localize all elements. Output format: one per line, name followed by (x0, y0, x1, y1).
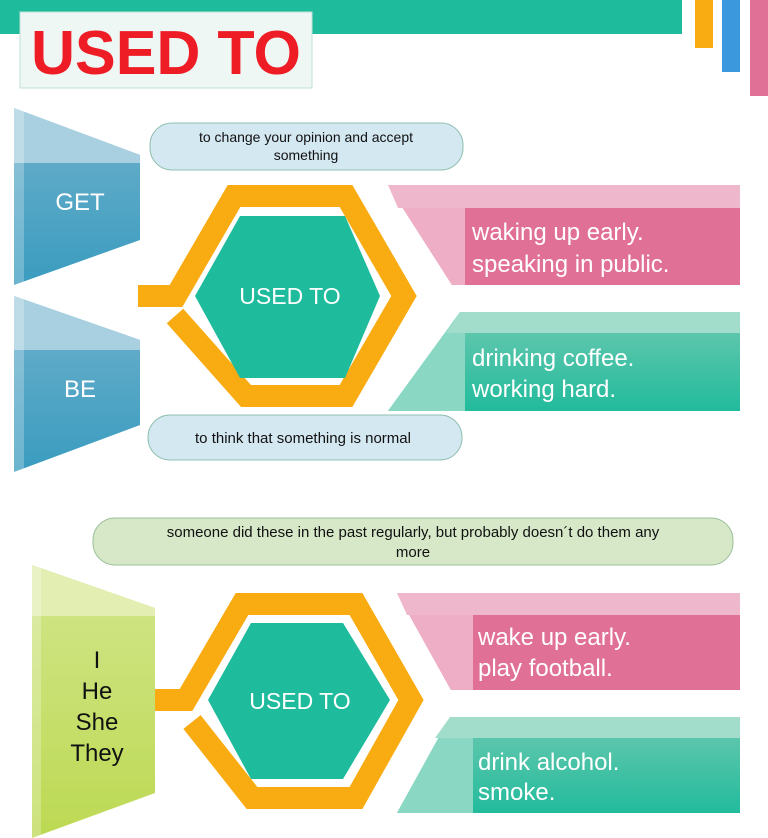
header bar (0, 0, 682, 34)
hexagon: used to (bottom) (155, 604, 411, 798)
panel: pink getting used to (388, 185, 740, 285)
shape: subjects (32, 565, 155, 838)
callout: be definition: to think that something is normal (195, 430, 411, 447)
hexagon: used to (top) (138, 196, 404, 396)
panel: teal be used to (388, 312, 740, 411)
callout: past habit definition: someone did these in the past regularly, but probably doesn´t do them any (167, 524, 660, 541)
panel: pink getting used to: speaking in public. (472, 251, 669, 278)
callout: past habit definition (93, 518, 733, 565)
callout: get definition (150, 123, 463, 170)
shape: subjects: I (94, 647, 100, 674)
panel: pink past habits: play football. (478, 655, 613, 682)
panel: pink past habits (397, 593, 740, 690)
hexagon: used to (top): USED TO (239, 283, 341, 309)
shape: GET: GET (55, 189, 105, 216)
panel: teal past habits: drink alcohol. (478, 749, 619, 776)
hexagon: used to (bottom): USED TO (249, 688, 351, 714)
panel: teal past habits: smoke. (478, 779, 555, 806)
decorative bars top right (695, 0, 768, 96)
callout: get definition: something (274, 147, 338, 163)
panel: pink past habits: wake up early. (477, 624, 631, 651)
shape: GET (14, 108, 140, 285)
panel: teal be used to: drinking coffee. (472, 345, 634, 372)
shape: BE: BE (64, 376, 96, 403)
panel: teal past habits (397, 717, 740, 813)
shape: subjects: He (82, 678, 112, 705)
panel: teal be used to: working hard. (471, 376, 616, 403)
title box: USED TO (31, 19, 301, 88)
callout: get definition: to change your opinion and accept (199, 129, 413, 145)
callout: be definition (148, 415, 462, 460)
shape: subjects: She (76, 709, 118, 736)
panel: pink getting used to: waking up early. (471, 219, 644, 246)
shape: subjects: They (70, 740, 124, 767)
shape: BE (14, 296, 140, 472)
callout: past habit definition: more (396, 544, 430, 561)
